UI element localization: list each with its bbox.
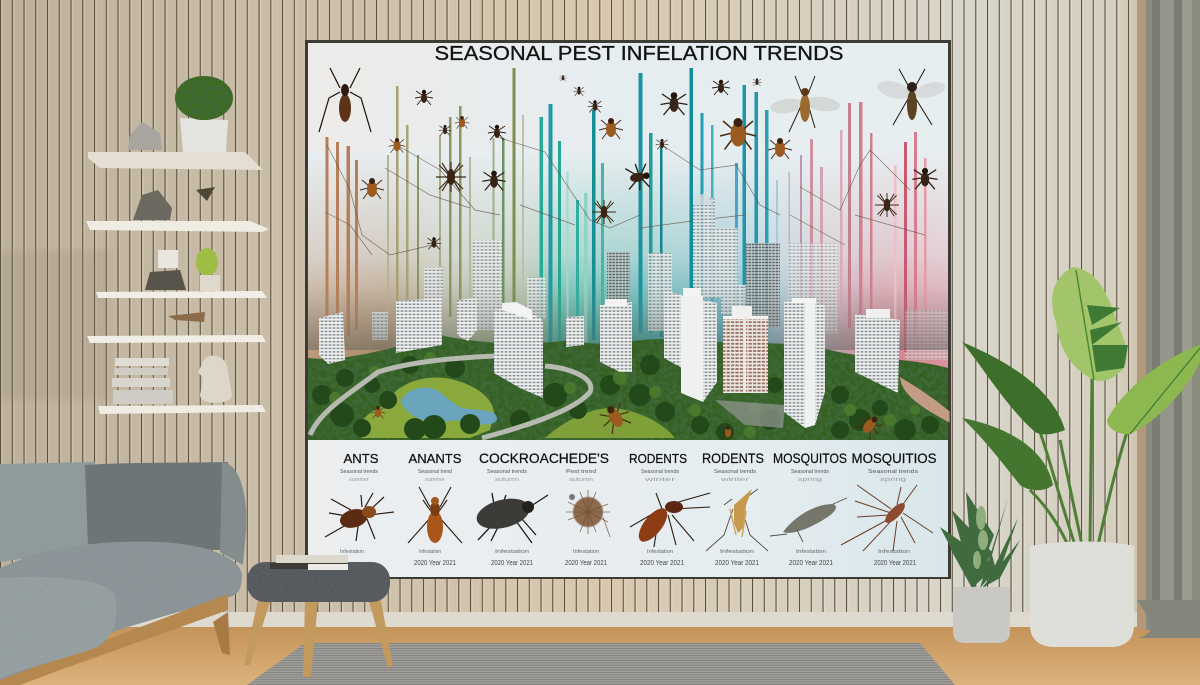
icon: furry rodent specimen xyxy=(566,490,610,537)
column years: 2020 Year 2021 xyxy=(640,560,684,567)
skyscrapers xyxy=(319,288,900,428)
flying insects on chart xyxy=(360,75,938,441)
left upper leaf xyxy=(962,342,1065,434)
left lower leaf xyxy=(962,418,1053,490)
sofa xyxy=(0,462,246,685)
column heading: COCKROACHEDE'S: COCKROACHEDE'S xyxy=(479,450,609,466)
plant in white pot xyxy=(175,76,233,152)
icon: winged insect two xyxy=(876,69,947,125)
stool seat xyxy=(247,562,390,602)
poster frame xyxy=(305,40,951,579)
sofa seat xyxy=(0,542,242,685)
column footnotes: Infestation xyxy=(573,549,599,555)
icon: winged insect one xyxy=(769,76,841,132)
small column captions: Seasonal trends xyxy=(868,469,919,475)
column years: 2020 Year 2021 xyxy=(874,560,916,567)
shelf 3 xyxy=(96,291,267,298)
column years: 2020 Year 2021 xyxy=(789,560,833,567)
stool legs xyxy=(244,596,393,677)
large plant xyxy=(962,267,1200,647)
stool xyxy=(244,555,393,677)
tower 3 xyxy=(457,298,477,341)
tower 10 xyxy=(855,309,900,393)
small column captions: winter xyxy=(645,477,676,483)
shelf 4 xyxy=(87,335,266,343)
spiky foliage xyxy=(940,492,1020,588)
light centre leaves xyxy=(973,506,988,569)
top leaf xyxy=(1052,267,1128,381)
tower 5 xyxy=(600,299,632,372)
column footnotes: Infestation xyxy=(495,549,529,555)
column footnotes: Infestation xyxy=(796,549,826,555)
sofa back left xyxy=(0,462,95,562)
pond xyxy=(401,388,497,425)
column heading: MOSQUITIOS: MOSQUITIOS xyxy=(852,450,936,466)
poster background xyxy=(308,43,948,577)
shelf 2 xyxy=(86,221,269,232)
books on stool xyxy=(270,555,348,570)
column heading: MOSQUITOS: MOSQUITOS xyxy=(773,450,847,466)
bottom info panel xyxy=(308,440,948,577)
lawn around pond xyxy=(359,377,494,438)
poster: seasonal pest trends xyxy=(305,40,951,579)
small column captions: autumn xyxy=(495,477,519,483)
road: right curve xyxy=(482,366,591,438)
icon: cockroach specimen xyxy=(474,493,548,543)
wall shelves xyxy=(86,76,269,414)
landscape: green park xyxy=(308,335,948,441)
tower 4 xyxy=(494,302,543,398)
skyline: distant buildings xyxy=(372,193,948,360)
road: left curve xyxy=(310,356,495,435)
baseboard and wooden floor xyxy=(0,612,1200,685)
tower 9 xyxy=(784,298,825,428)
icon: pale mosquito specimen xyxy=(706,489,768,551)
bar chart: teal series xyxy=(540,68,778,344)
small column captions: winter xyxy=(721,477,750,483)
ornament top shelf xyxy=(128,122,162,150)
large white pot xyxy=(1030,542,1134,647)
sofa wood frame xyxy=(0,594,228,685)
curtain xyxy=(1137,0,1200,638)
trend lines xyxy=(325,137,925,255)
right leaf xyxy=(1107,345,1200,434)
small column captions: Seasonal trends xyxy=(791,469,830,475)
small column captions: spring xyxy=(798,477,822,483)
column footnotes: Infestation xyxy=(647,549,673,555)
icon: red ant specimen xyxy=(630,493,710,547)
icon: long-legged mosquito specimen xyxy=(841,485,933,551)
column years xyxy=(414,560,916,567)
column years: 2020 Year 2021 xyxy=(491,560,533,567)
column footnotes xyxy=(340,549,910,555)
small grey pot xyxy=(953,587,1010,643)
tower 6 xyxy=(566,316,584,347)
sofa front leg xyxy=(213,612,230,655)
stack of books xyxy=(112,358,173,404)
small column captions: Seasonal trends xyxy=(340,469,379,475)
title: SEASONAL PEST INFELATION TRENDS xyxy=(434,43,844,65)
icon: termite specimen xyxy=(408,487,462,543)
small column captions: Seasonal trends xyxy=(641,469,680,475)
ground foliage xyxy=(308,335,948,440)
ornament third shelf xyxy=(145,248,220,291)
ornament second shelf xyxy=(133,190,172,220)
bar chart: pink series xyxy=(788,102,926,352)
column heading: ANTS: ANTS xyxy=(344,451,379,466)
column heading: ANANTS: ANANTS xyxy=(408,451,462,466)
tower 1 xyxy=(319,312,345,364)
bar chart: olive series xyxy=(387,68,524,338)
small column captions: Seasonal trends xyxy=(487,469,528,475)
small column captions: spring xyxy=(880,477,906,483)
small plant xyxy=(940,492,1020,643)
column years: 2020 Year 2021 xyxy=(715,560,759,567)
column years: 2020 Year 2021 xyxy=(414,560,456,567)
sofa arm xyxy=(220,462,246,565)
tower 7 xyxy=(664,288,717,402)
foliage clumps dark xyxy=(312,355,939,441)
small column captions: summer xyxy=(349,477,369,483)
small items on fourth shelf xyxy=(168,312,205,322)
column years: 2020 Year 2021 xyxy=(565,560,607,567)
bar chart: orange series xyxy=(326,137,358,337)
rug xyxy=(247,643,955,685)
column footnotes: Infestation xyxy=(720,549,754,555)
haze at skyline base xyxy=(308,285,948,350)
icon: ant specimen xyxy=(325,493,394,541)
foliage clumps light xyxy=(329,352,920,438)
rocks xyxy=(715,400,785,428)
sofa front cushion xyxy=(0,577,116,678)
small column captions: autumn xyxy=(569,477,593,483)
colour bands behind chart xyxy=(308,150,948,385)
column heading: RODENTS: RODENTS xyxy=(629,451,687,466)
small column captions: Seasonal trend xyxy=(418,469,452,475)
figurine xyxy=(198,356,232,403)
small column captions xyxy=(340,469,919,483)
icon: large ant top left xyxy=(319,68,371,132)
shelf 1 xyxy=(88,152,263,170)
stems xyxy=(1030,378,1127,545)
shelf 5 xyxy=(98,405,266,414)
small column captions: Pest trend xyxy=(566,469,596,475)
sofa back right xyxy=(85,462,228,550)
tower 2 xyxy=(396,298,442,353)
path: pink trail xyxy=(902,380,948,420)
column footnotes: Infestation xyxy=(419,549,441,555)
column heading: RODENTS second: RODENTS xyxy=(702,450,764,466)
column footnotes: Infestation xyxy=(340,549,364,555)
small insect on wall xyxy=(196,187,215,201)
icon: grey moth specimen xyxy=(770,498,847,542)
small column captions: summer xyxy=(425,477,445,483)
lawn lower xyxy=(545,408,675,438)
small column captions: Seasonal trends xyxy=(714,469,757,475)
tower 8 xyxy=(723,306,768,393)
column footnotes: Infestation xyxy=(878,549,910,555)
